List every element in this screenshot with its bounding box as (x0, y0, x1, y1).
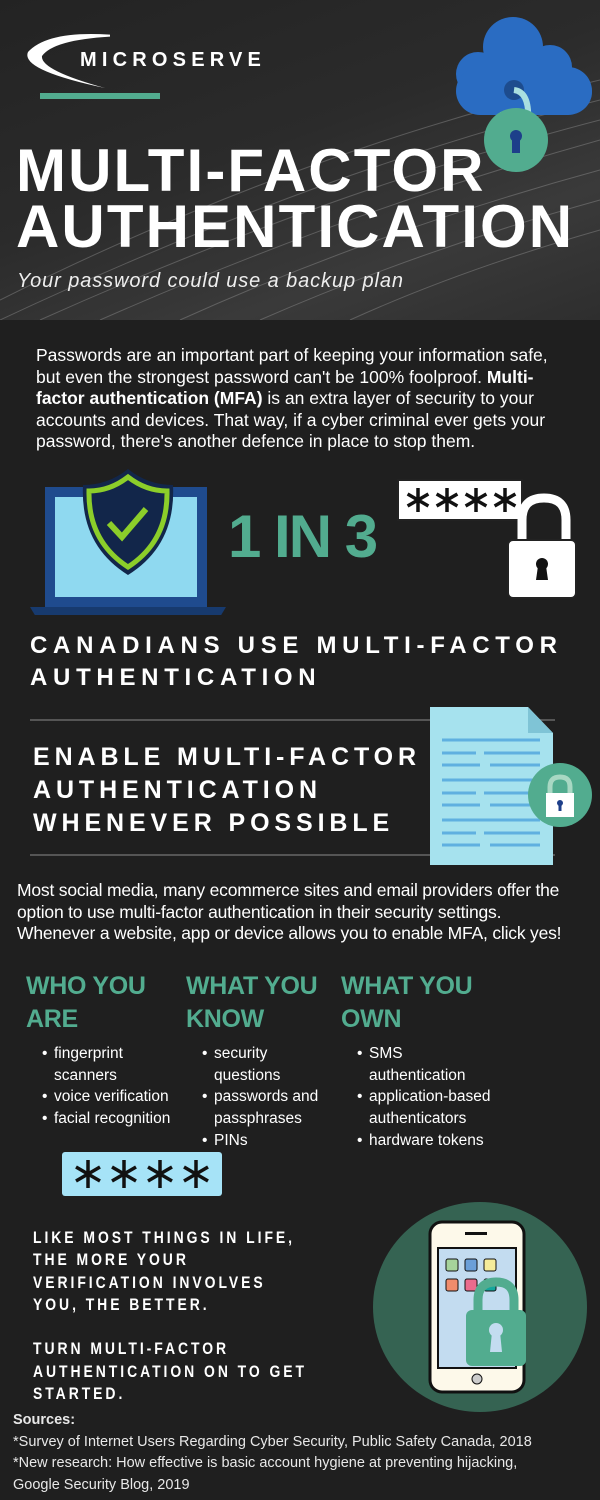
heading: enable MFA: WHENEVER POSSIBLE (33, 809, 394, 837)
icon: password box and padlock (399, 481, 575, 597)
icon: document with lock (430, 707, 592, 865)
sources: Sources: (13, 1412, 75, 1428)
header background (0, 0, 600, 320)
paragraph: social media: Whenever a website, app or device allows you to enable MFA, click yes! (17, 923, 561, 943)
column: who you are: WHO YOU (26, 972, 146, 1000)
icon: phone with lock (373, 1202, 587, 1412)
column: who you are: facial recognition (54, 1110, 170, 1127)
column: who you are: voice verification (54, 1088, 169, 1105)
title: MULTI-FACTOR (16, 137, 486, 204)
column: what you know: security (214, 1045, 267, 1062)
title (16, 137, 574, 260)
column: who you are: fingerprint (54, 1045, 123, 1062)
subtitle: Your password could use a backup plan (17, 270, 404, 292)
icon: password field (62, 1152, 222, 1196)
stat label: CANADIANS USE MULTI-FACTOR (30, 632, 563, 659)
column: what you own: authentication (369, 1067, 466, 1084)
sources: *New research: How effective is basic account hygiene at preventing hijacking, (13, 1455, 517, 1471)
column: what you own: authenticators (369, 1110, 466, 1127)
paragraph: social media (17, 880, 561, 943)
column: what you own: WHAT YOU (341, 972, 472, 1000)
stat: 1 in 3: 1 IN 3 (228, 503, 376, 570)
stat label: AUTHENTICATION (30, 664, 321, 691)
closing message: YOU, THE BETTER. (33, 1295, 210, 1314)
closing message: AUTHENTICATION ON TO GET (33, 1362, 307, 1381)
column: what you own: hardware tokens (369, 1132, 484, 1149)
sources: Google Security Blog, 2019 (13, 1476, 190, 1492)
title: AUTHENTICATION (16, 193, 574, 260)
icon: laptop with shield (30, 469, 226, 615)
column: what you know: passwords and (214, 1088, 318, 1105)
closing message (33, 1228, 307, 1403)
logo (27, 34, 266, 88)
heading: enable MFA: ENABLE MULTI-FACTOR (33, 743, 421, 771)
column: what you know: PINs (214, 1132, 248, 1149)
sources (13, 1412, 532, 1492)
green bar (40, 93, 160, 99)
column: what you own (341, 972, 491, 1149)
sources: *Survey of Internet Users Regarding Cyber Security, Public Safety Canada, 2018 (13, 1434, 532, 1450)
column: who you are (26, 972, 170, 1127)
paragraph: social media: Most social media, many ecommerce sites and email providers offer the (17, 880, 559, 900)
closing message: LIKE MOST THINGS IN LIFE, (33, 1228, 295, 1247)
stat label (30, 632, 563, 691)
heading: enable MFA (33, 743, 421, 837)
paragraph: social media: option to use multi-factor authentication in their security settings. (17, 902, 501, 922)
closing message: STARTED. (33, 1384, 125, 1403)
heading: enable MFA: AUTHENTICATION (33, 776, 322, 804)
column: who you are: ARE (26, 1005, 78, 1033)
column: what you know: WHAT YOU (186, 972, 317, 1000)
closing message: VERIFICATION INVOLVES (33, 1273, 266, 1292)
icon: cloud lock (456, 17, 592, 172)
column: what you know (186, 972, 318, 1149)
logo: MICROSERVE (80, 49, 266, 71)
column: what you know: passphrases (214, 1110, 302, 1127)
column: what you own: OWN (341, 1005, 401, 1033)
column: who you are: scanners (54, 1067, 117, 1084)
closing message: THE MORE YOUR (33, 1250, 189, 1269)
column: what you own: application-based (369, 1088, 491, 1105)
column: what you know: questions (214, 1067, 280, 1084)
intro paragraph: Passwords are an important part of keeping your information safe, but even the strongest password can't be 100% foolproof. Multi-factor authentication (MFA) is an extra layer of security to your accounts and devices. That way, if a cyber criminal ever gets your password, there's another defence in place to stop them. (36, 345, 548, 451)
closing message: TURN MULTI-FACTOR (33, 1339, 229, 1358)
column: what you own: SMS (369, 1045, 403, 1062)
column: what you know: KNOW (186, 1005, 264, 1033)
